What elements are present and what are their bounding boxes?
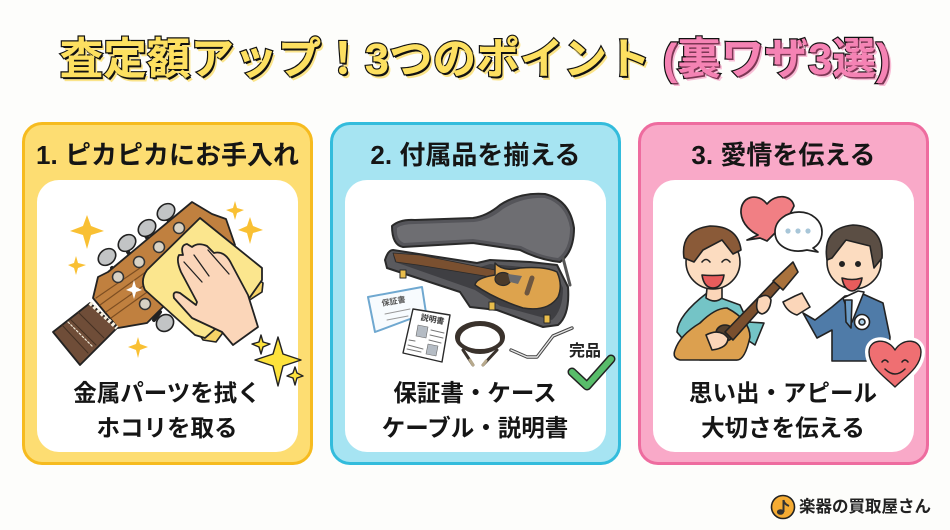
- check mark: [572, 359, 611, 386]
- guitarist: [674, 226, 798, 360]
- guitar neck and head: [393, 253, 505, 279]
- coiled cable: [457, 323, 503, 365]
- cloth: [143, 218, 262, 338]
- label: complete set: 完品: [569, 342, 601, 360]
- white card: point 3: [652, 180, 914, 452]
- frets: [62, 312, 104, 353]
- case hinge strap: [563, 258, 570, 285]
- panel: 3 affection: [638, 122, 929, 465]
- case lid: [392, 194, 574, 262]
- hand: [174, 244, 258, 345]
- caption: point 2: [382, 380, 568, 441]
- headstock: [93, 202, 235, 328]
- case base: [385, 250, 568, 327]
- heart speech bubble: [741, 197, 794, 241]
- icon: guitarist talking with appraiser: [673, 196, 925, 388]
- heading: point 2: 2. 付属品を揃える: [370, 140, 581, 170]
- talk bubble: [775, 212, 822, 252]
- caption: point 2: 保証書・ケース: [393, 380, 557, 406]
- panel: 2 accessories: [330, 122, 621, 465]
- caption: point 3: [689, 380, 877, 441]
- caption: point 3: 大切さを伝える: [701, 415, 865, 441]
- fretboard: [53, 303, 117, 365]
- pale pickguard: [508, 274, 522, 284]
- heading: point 1: 1. ピカピカにお手入れ: [36, 140, 299, 170]
- icon: guitar headstock being polished: [52, 201, 304, 387]
- finger gaps: [184, 250, 229, 282]
- caption: point 1: [73, 380, 261, 441]
- nut: [90, 303, 117, 328]
- single cable: [511, 328, 572, 357]
- logo text: 楽器の買取屋さん: [799, 498, 931, 516]
- panel: 1 cleaning: [22, 122, 313, 465]
- certificate: [368, 287, 426, 332]
- caption: point 2: ケーブル・説明書: [382, 415, 568, 441]
- certificate: 保証書: [381, 294, 406, 308]
- icon: music note: [770, 494, 796, 520]
- manual: [403, 309, 450, 362]
- guitar body: [475, 263, 560, 309]
- white card: point 2: [344, 180, 606, 452]
- appraiser: [783, 225, 890, 361]
- logo: [770, 494, 931, 520]
- cloth under layer: [190, 265, 263, 342]
- latches: [400, 270, 550, 323]
- sparkles: bright with outline: [252, 335, 303, 386]
- white card: point 1: [36, 180, 298, 452]
- case interior: [393, 255, 563, 320]
- caption: point 1: ホコリを取る: [96, 415, 238, 441]
- manual: 説明書: [420, 312, 445, 326]
- glints: [126, 280, 142, 299]
- caption: point 1: 金属パーツを拭く: [73, 380, 261, 406]
- tuning pegs: [95, 200, 178, 335]
- lid lining: [397, 198, 570, 258]
- title: 査定額アップ！3つのポイント (裏ワザ3選): [60, 36, 890, 84]
- heading: point 3: 3. 愛情を伝える: [691, 140, 876, 170]
- peg bushings: [112, 222, 184, 310]
- icon: guitar in open hard case: [367, 192, 616, 390]
- sound hole and bridge: [495, 272, 511, 286]
- sparkles: orange: [68, 201, 263, 358]
- caption: point 3: 思い出・アピール: [689, 380, 877, 406]
- smiling heart: [868, 340, 922, 389]
- strings: [96, 258, 183, 318]
